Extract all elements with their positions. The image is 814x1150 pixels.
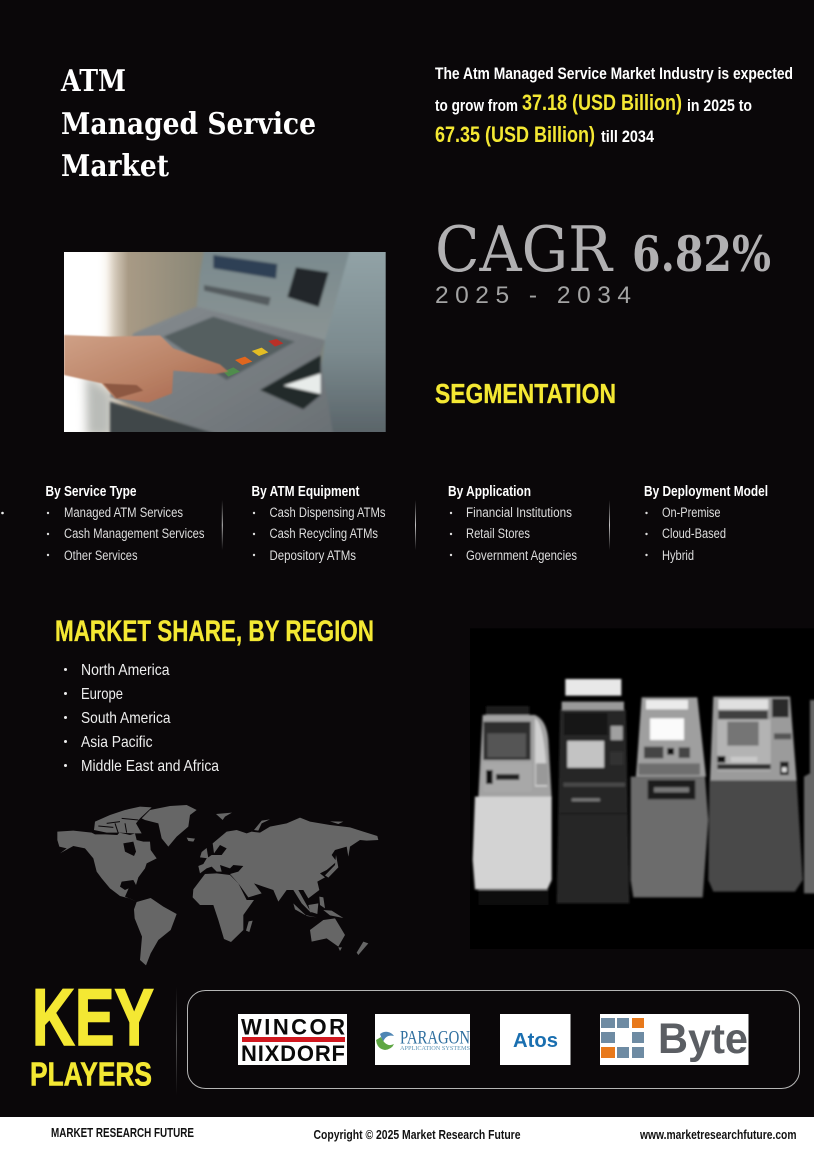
column: by service type: By Service Type	[46, 483, 136, 500]
column: by service type: Managed ATM Services	[64, 505, 183, 520]
logo: Paragon	[375, 1014, 470, 1065]
column: by application	[448, 483, 577, 563]
title	[60, 64, 316, 184]
logo: Paragon: APPLICATION SYSTEMS	[400, 1046, 470, 1052]
column: by deployment model	[644, 483, 768, 563]
column: by deployment model: Cloud-Based	[662, 526, 726, 541]
key players logo box	[188, 990, 800, 1088]
photo: row of ATM machines	[470, 628, 814, 949]
logo: Paragon: PARAGON	[400, 1028, 470, 1048]
heading: key players: KEY	[32, 973, 154, 1063]
market size statement: till 2034	[601, 127, 654, 146]
logo: Byte: Byte	[658, 1015, 748, 1063]
ATM machine 5 partial	[804, 700, 814, 893]
column: by application: Retail Stores	[466, 526, 530, 541]
CAGR figure	[435, 213, 771, 309]
ATM machine 3	[631, 697, 708, 897]
heading: segmentation: SEGMENTATION	[435, 378, 616, 409]
region list: North America	[81, 662, 170, 679]
column: by application: Financial Institutions	[466, 505, 572, 520]
heading: key players: PLAYERS	[30, 1056, 152, 1092]
market size statement: 37.18 (USD Billion)	[522, 90, 682, 115]
photo: finger pressing ATM keypad	[57, 247, 388, 437]
column: by application: Government Agencies	[466, 548, 577, 563]
column: by service type	[46, 483, 205, 563]
heading: market share by region: MARKET SHARE, BY REGION	[55, 615, 374, 648]
column: by deployment model: By Deployment Model	[644, 483, 768, 500]
region list: Middle East and Africa	[81, 758, 219, 775]
market size statement: in 2025 to	[687, 96, 752, 115]
column: by application: By Application	[448, 483, 531, 500]
logo: Wincor Nixdorf	[238, 1014, 347, 1066]
market size statement: 67.35 (USD Billion)	[435, 122, 595, 147]
market size statement: to grow from	[435, 96, 518, 115]
footer bar: Copyright © 2025 Market Research Future	[314, 1127, 520, 1142]
ATM machine 4	[708, 697, 803, 892]
market size statement	[435, 64, 793, 147]
logo: Wincor Nixdorf: NIXDORF	[241, 1041, 345, 1066]
region list: South America	[81, 710, 171, 727]
logo: Wincor Nixdorf: WINCOR	[241, 1014, 345, 1040]
ATM machine 2	[557, 679, 629, 903]
logo: Atos: Atos	[513, 1030, 558, 1052]
region list	[64, 662, 219, 775]
column: by deployment model: Hybrid	[662, 548, 694, 563]
column: by ATM equipment: By ATM Equipment	[252, 483, 360, 500]
title: Managed Service	[61, 107, 316, 142]
CAGR figure: 2025 - 2034	[435, 282, 631, 309]
CAGR figure: CAGR	[435, 213, 613, 286]
title: Market	[61, 149, 169, 184]
logo: Byte	[600, 1014, 748, 1065]
footer bar	[0, 1117, 814, 1150]
column: by service type: Other Services	[64, 548, 138, 563]
column: by service type: Cash Management Services	[64, 526, 205, 541]
logo: Atos	[500, 1014, 570, 1065]
column: by deployment model: On-Premise	[662, 505, 720, 520]
region list: Europe	[81, 686, 123, 703]
ATM machine 1	[473, 706, 552, 905]
column: by ATM equipment	[252, 483, 386, 563]
title: ATM	[60, 64, 126, 99]
column: by ATM equipment: Cash Dispensing ATMs	[270, 505, 386, 520]
CAGR figure: 6.82%	[632, 225, 771, 283]
heading: key players	[30, 973, 154, 1092]
stray bullet	[1, 512, 4, 514]
column: by ATM equipment: Depository ATMs	[270, 548, 356, 563]
segmentation columns	[1, 483, 768, 563]
footer bar: MARKET RESEARCH FUTURE	[51, 1125, 194, 1140]
world map	[57, 805, 378, 965]
column: by ATM equipment: Cash Recycling ATMs	[270, 526, 378, 541]
region list: Asia Pacific	[81, 734, 152, 751]
